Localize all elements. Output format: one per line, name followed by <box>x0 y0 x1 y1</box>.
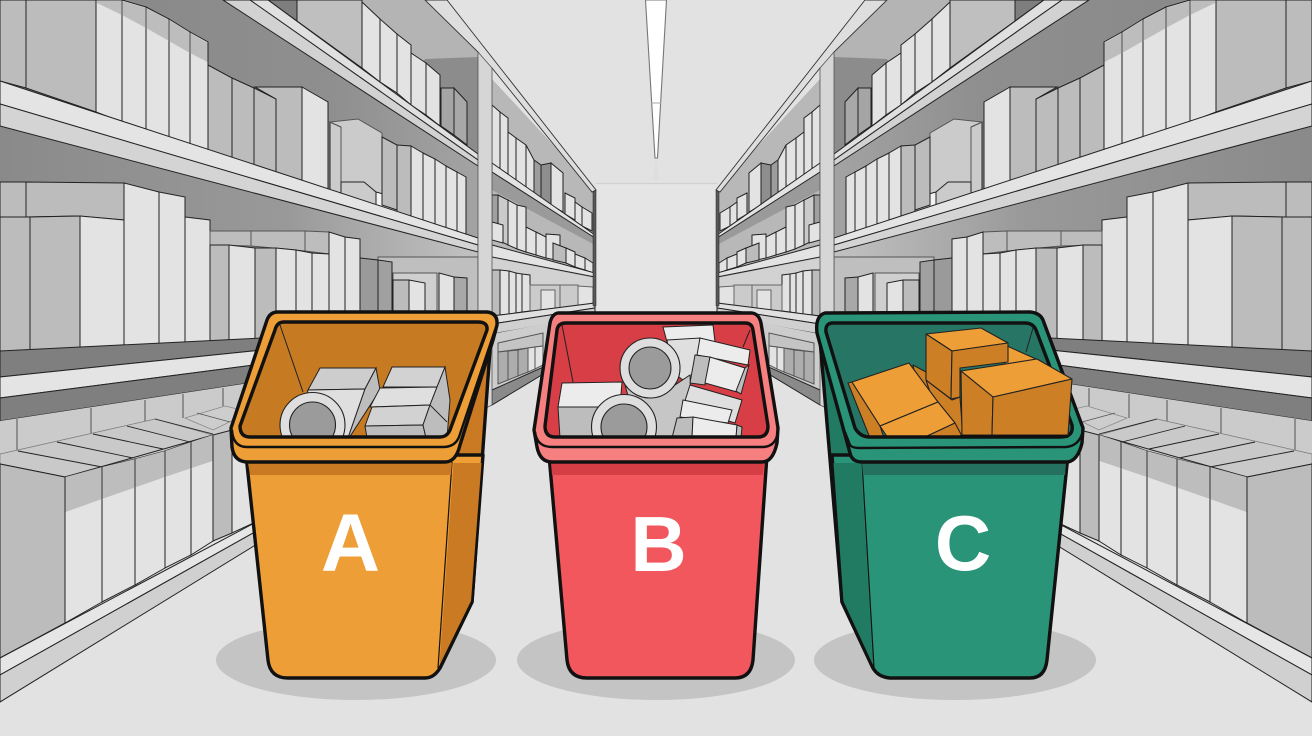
bin C front face <box>832 455 1068 678</box>
bin C interior outline <box>826 323 1072 437</box>
third bay background <box>0 126 478 360</box>
lower section: box tops <box>0 406 250 477</box>
bin A side shading <box>440 463 482 665</box>
far bay bottom boxes <box>492 322 555 392</box>
bin C rim lip line <box>845 432 1082 448</box>
bin A front face <box>246 455 483 678</box>
bin C front-side edge <box>862 462 874 668</box>
bin C front orange box <box>960 359 1072 436</box>
lower shelf board <box>0 519 262 702</box>
bin B contents <box>557 324 750 436</box>
rack central post <box>478 52 492 412</box>
bin A interior <box>240 322 487 437</box>
far bay boxes, lower row <box>492 270 593 316</box>
top shelf board <box>223 0 478 166</box>
bin B interior <box>545 323 768 437</box>
left shelving rack <box>0 0 596 702</box>
bin C rim <box>817 312 1083 462</box>
bin C rim shadow <box>862 463 1066 475</box>
bin A front-side edge <box>438 462 452 668</box>
bin A rim lip line <box>232 330 495 447</box>
bin C interior <box>826 323 1072 437</box>
bin B front face <box>549 455 767 678</box>
right shelving rack (mirror of the left rack) <box>716 0 1312 702</box>
floor shadows under bins <box>216 620 1096 700</box>
bin A side face <box>440 350 490 668</box>
bin A contents <box>279 324 450 436</box>
second row boxes <box>0 0 466 237</box>
letter C: C <box>935 499 991 587</box>
bin B interior outline <box>545 323 768 437</box>
far bay kick plate <box>492 364 550 405</box>
ceiling light strip <box>646 0 666 180</box>
bin A <box>231 312 497 678</box>
third row boxes <box>0 182 478 352</box>
second bay background <box>0 0 478 238</box>
bin B rim shadow <box>551 463 764 475</box>
bin C side face <box>820 340 873 668</box>
bin A rim shadow <box>248 463 452 475</box>
back wall of the aisle <box>596 184 717 394</box>
top bay background <box>223 0 478 166</box>
bin B rim lip line <box>535 432 777 447</box>
lower section: back boxes <box>0 381 262 470</box>
bin C <box>817 312 1083 678</box>
far bay shadow panels <box>492 170 595 320</box>
bin B <box>534 313 778 678</box>
lower section: beam bands <box>0 338 262 421</box>
rack frame top beam <box>425 0 596 192</box>
far bay boxes, upper row <box>492 105 592 231</box>
far bay background <box>492 79 595 330</box>
letter A: A <box>321 498 380 589</box>
lower section: front boxes <box>0 423 262 658</box>
bin C contents <box>848 328 1036 438</box>
bin A interior outline <box>240 322 487 437</box>
letter B: B <box>630 500 687 588</box>
second shelf board <box>0 81 478 252</box>
far bay shelf boards <box>492 163 595 334</box>
rack end post <box>593 190 596 306</box>
bin B rim <box>534 313 778 462</box>
bin A rim <box>231 312 497 462</box>
bin C side shading <box>834 463 873 665</box>
far bay boxes, middle row <box>492 195 593 273</box>
upper row boxes on top shelf <box>297 0 467 145</box>
